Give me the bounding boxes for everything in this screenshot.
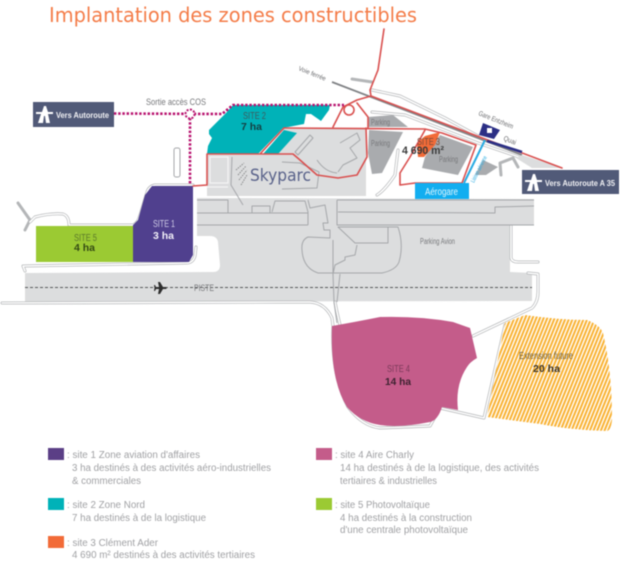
swatch: site 4 <box>316 448 332 460</box>
label: voie ferrée: Voie ferrée <box>297 65 327 83</box>
label: quai: Quai <box>502 135 517 147</box>
label: extension future <box>519 351 573 375</box>
railway line <box>332 82 522 155</box>
parking areas <box>368 115 498 175</box>
label: parking 1: Parking <box>371 118 390 127</box>
access dotted route <box>114 105 344 185</box>
legend: site 5: : site 5 Photovoltaïque <box>335 500 430 511</box>
site 1 area <box>133 186 193 262</box>
runway centre line <box>25 286 532 288</box>
label: piste: PISTE <box>194 283 214 293</box>
legend: site 1: & commerciales <box>72 476 141 487</box>
label: parking 3: Parking <box>439 155 458 164</box>
legend: site 1: 3 ha destinés à des activités aéro-industrielles <box>72 463 271 474</box>
legend: site 2: : site 2 Zone Nord <box>67 500 145 511</box>
icon: motorway <box>36 106 53 123</box>
label: site 3: 4 690 m² <box>402 145 444 157</box>
airport map <box>2 29 612 431</box>
icon: train station <box>479 123 500 139</box>
apron outlines <box>174 133 534 323</box>
roads <box>2 79 538 428</box>
red road network <box>193 29 562 186</box>
legend: site 4: tertiaires & industrielles <box>340 476 437 487</box>
legend: site 5: d'une centrale photovoltaïque <box>340 525 468 536</box>
title: Implantation des zones constructibles <box>49 3 417 27</box>
quai <box>487 141 522 152</box>
terminal: aerogare: Aérogare <box>425 187 458 198</box>
sign: vers autoroute: Vers Autoroute <box>56 111 110 120</box>
label: site 4: 14 ha <box>385 376 411 388</box>
site 2 area <box>207 105 330 154</box>
label: site 5 <box>74 233 97 254</box>
label: site 4: SITE 4 <box>387 364 410 375</box>
legend: site 5 <box>316 498 472 536</box>
label: parking avion: Parking Avion <box>420 237 455 246</box>
label: site 2: SITE 2 <box>243 111 266 122</box>
label: site 2 <box>241 111 266 133</box>
railway platform <box>516 155 562 168</box>
terminal: aerogare <box>415 183 469 199</box>
grey area: apron and runway <box>25 198 534 302</box>
legend: site 2 <box>48 498 206 524</box>
sign: vers autoroute A 35: Vers Autoroute A 35 <box>545 179 616 188</box>
label: site 2: 7 ha <box>241 121 262 133</box>
legend: site 3: : site 3 Clément Ader <box>67 538 159 549</box>
label: extension future: 20 ha <box>533 363 560 375</box>
icon: motorway <box>525 174 542 191</box>
legend: site 3: 4 690 m² destinés à des activités tertiaires <box>72 550 255 561</box>
label: site 5: 4 ha <box>74 242 95 254</box>
label: site 1 <box>153 219 175 242</box>
icon: Skyparc logo mark <box>236 163 247 185</box>
label: parking 2: Parking <box>371 139 390 148</box>
site 5 area <box>36 226 133 262</box>
label: site 1: SITE 1 <box>153 219 175 230</box>
site 2 strip below the road <box>263 130 297 154</box>
legend: site 2: 7 ha destinés à de la logistique <box>72 513 206 524</box>
legend: site 1: : site 1 Zone aviation d'affaires <box>67 450 200 461</box>
airport link line <box>464 140 485 183</box>
legend: site 4: : site 4 Aire Charly <box>335 450 414 461</box>
legend: site 1 <box>48 448 271 487</box>
label: site 4 <box>385 364 411 388</box>
swatch: site 1 <box>48 448 64 460</box>
label: gare: Gare Entzheim <box>477 110 514 131</box>
legend: site 4 <box>316 448 539 487</box>
legend: site 5: 4 ha destinés à la construction <box>340 513 472 524</box>
legend: site 3 <box>48 536 255 561</box>
grey area: Skyparc <box>207 128 366 196</box>
swatch: site 3 <box>48 536 64 548</box>
label: sortie acces COS: Sortie accès COS <box>146 97 206 107</box>
legend: site 4: 14 ha destinés à de la logistique, des activités <box>340 463 539 474</box>
swatch: site 2 <box>48 498 64 510</box>
map label: Skyparc: Skyparc <box>250 166 311 186</box>
sign: vers autoroute <box>33 102 114 127</box>
label: site 1: 3 ha <box>153 230 174 242</box>
label: site 3 <box>402 137 444 157</box>
sign: vers autoroute A 35 <box>522 170 619 194</box>
icon: plane <box>154 282 167 294</box>
label: site 3: SITE 3 <box>417 137 440 148</box>
site 3 area <box>417 132 440 157</box>
label: liaison: Liaison aérienne <box>470 155 489 184</box>
label: extension future: Extension future <box>519 351 573 362</box>
swatch: site 5 <box>316 498 332 510</box>
site 4 area <box>332 317 477 426</box>
extension future area <box>487 315 612 431</box>
label: site 5: SITE 5 <box>74 233 97 244</box>
